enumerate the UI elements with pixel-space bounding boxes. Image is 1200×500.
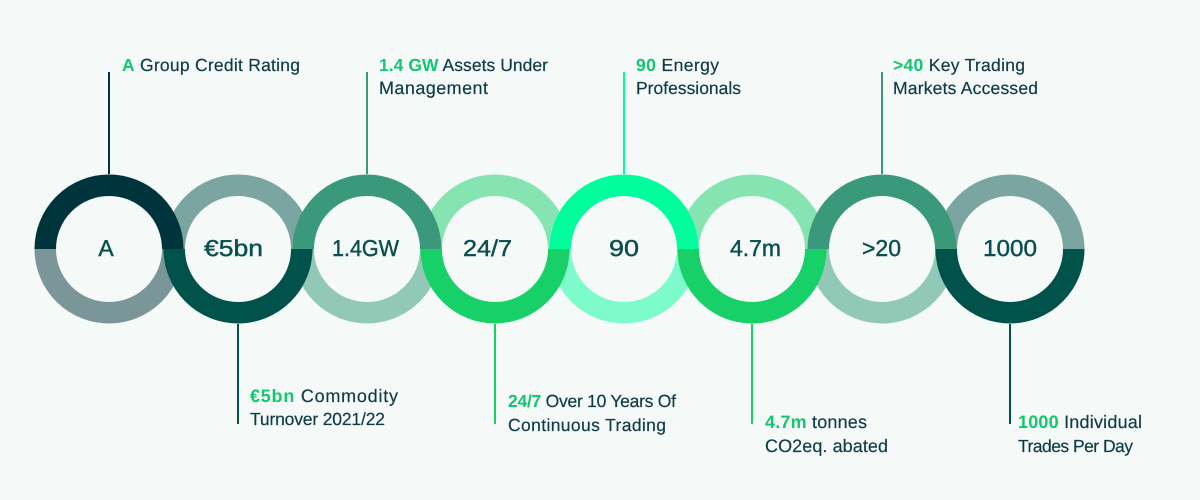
- label: trades per day: [1018, 412, 1142, 456]
- label: credit rating: A Group Credit Rating: [122, 55, 300, 75]
- strong ring halves on top of the chain: [45, 185, 1074, 313]
- connector line: professionals: [623, 72, 625, 174]
- ring value: 90: 90: [609, 235, 639, 261]
- connector line: assets: [366, 72, 368, 174]
- label: continuous trading: 24/7 Over 10 Years Of: [508, 391, 676, 411]
- ring value: 4.7m: 4.7m: [730, 235, 781, 261]
- connector line: credit rating: [108, 72, 110, 174]
- label: assets under management: 1.4 GW Assets Under: [379, 55, 548, 75]
- label: assets under management: Management: [379, 78, 488, 98]
- label: energy professionals: 90 Energy: [636, 55, 719, 75]
- ring value: >20: >20: [862, 235, 901, 261]
- label: commodity turnover: Turnover 2021/22: [250, 409, 385, 429]
- connector line: trading: [494, 324, 496, 424]
- connector line: markets: [881, 72, 883, 174]
- label: commodity turnover: [250, 386, 398, 429]
- label: commodity turnover: €5bn Commodity: [250, 386, 398, 406]
- ring value: 1.4GW: 1.4GW: [332, 235, 399, 261]
- label: continuous trading: Continuous Trading: [508, 415, 666, 435]
- label: assets under management: [379, 55, 548, 98]
- connector line: trades: [1009, 324, 1011, 424]
- label: key trading markets: [893, 55, 1038, 98]
- label: trades per day: 1000 Individual: [1018, 412, 1142, 432]
- ring value: A: A: [98, 235, 114, 261]
- ring value: 1000: 1000: [983, 235, 1037, 261]
- light ring halves behind the chain: [45, 185, 1074, 313]
- label: tonnes abated: 4.7m tonnes: [765, 412, 867, 432]
- label: tonnes abated: [765, 412, 888, 456]
- connector line: abated: [751, 324, 753, 424]
- label: trades per day: Trades Per Day: [1018, 436, 1133, 456]
- label: key trading markets: Markets Accessed: [893, 78, 1038, 98]
- label: energy professionals: Professionals: [636, 78, 741, 98]
- label: key trading markets: >40 Key Trading: [893, 55, 1025, 75]
- label: tonnes abated: CO2eq. abated: [765, 436, 888, 456]
- label: energy professionals: [636, 55, 741, 98]
- connector line: turnover: [237, 324, 239, 424]
- ring value: 5bn: €5bn: [204, 235, 263, 261]
- ring value: 24/7: 24/7: [463, 235, 512, 261]
- label: continuous trading: [508, 391, 676, 435]
